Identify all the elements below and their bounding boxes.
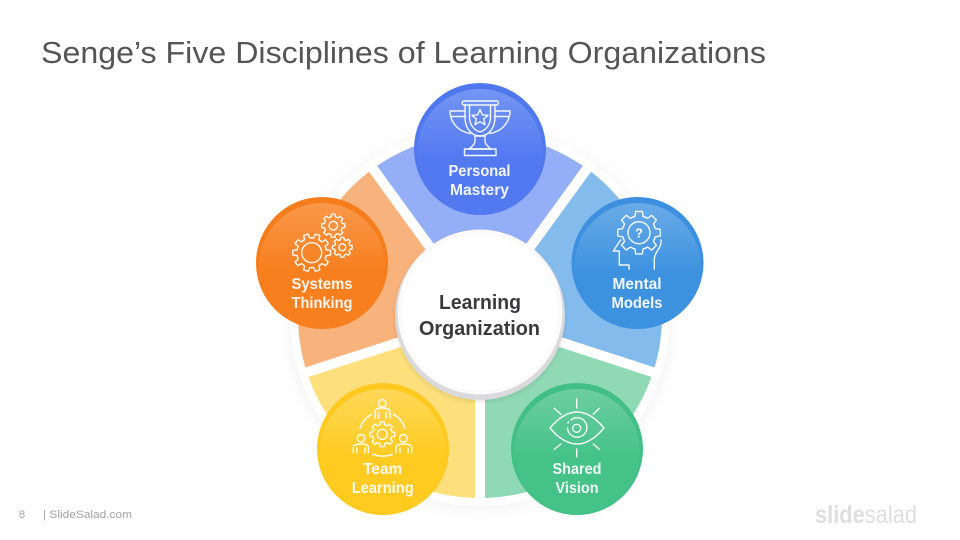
icon: team around gear: [353, 400, 412, 456]
logo wordmark: slidesalad: [815, 501, 917, 529]
node: systems thinking: [256, 197, 388, 329]
segment: shared vision: [480, 316, 653, 498]
wheel segments: [298, 134, 662, 505]
node: mental models: [572, 197, 704, 329]
center circle: [395, 230, 565, 400]
title: Senge’s Five Disciplines of Learning Organizations: [41, 35, 766, 70]
label: Systems: [292, 276, 353, 293]
center label: Organization: [419, 318, 540, 340]
segment: mental models: [480, 169, 662, 372]
node: personal mastery: [414, 83, 546, 215]
footer: page number: 8: [19, 509, 25, 521]
icon: trophy: [450, 101, 510, 156]
icon: three gears: [293, 214, 352, 272]
segment: team learning: [307, 316, 480, 498]
label: Mental: [612, 276, 662, 293]
node: shared vision: Vision: [556, 480, 598, 497]
node: shared vision: [511, 383, 643, 515]
center label: Learning: [439, 292, 521, 314]
node: personal mastery: Mastery: [450, 182, 509, 199]
segment: systems thinking: [298, 169, 480, 372]
node: mental models: Models: [612, 295, 663, 312]
segment: personal mastery: [373, 134, 587, 316]
footer: site name: | SlideSalad.com: [43, 509, 132, 521]
icon: head with gear: ?: [635, 226, 643, 240]
label: Shared: [552, 461, 602, 478]
label: Personal: [448, 163, 510, 180]
label: Team: [363, 461, 402, 478]
icon: eye: [550, 399, 604, 457]
node: systems thinking: Thinking: [292, 295, 352, 312]
node: team learning: Learning: [352, 480, 414, 497]
center label: [419, 292, 540, 340]
pentagon wheel backing ring: [290, 126, 670, 506]
node: team learning: [317, 383, 449, 515]
